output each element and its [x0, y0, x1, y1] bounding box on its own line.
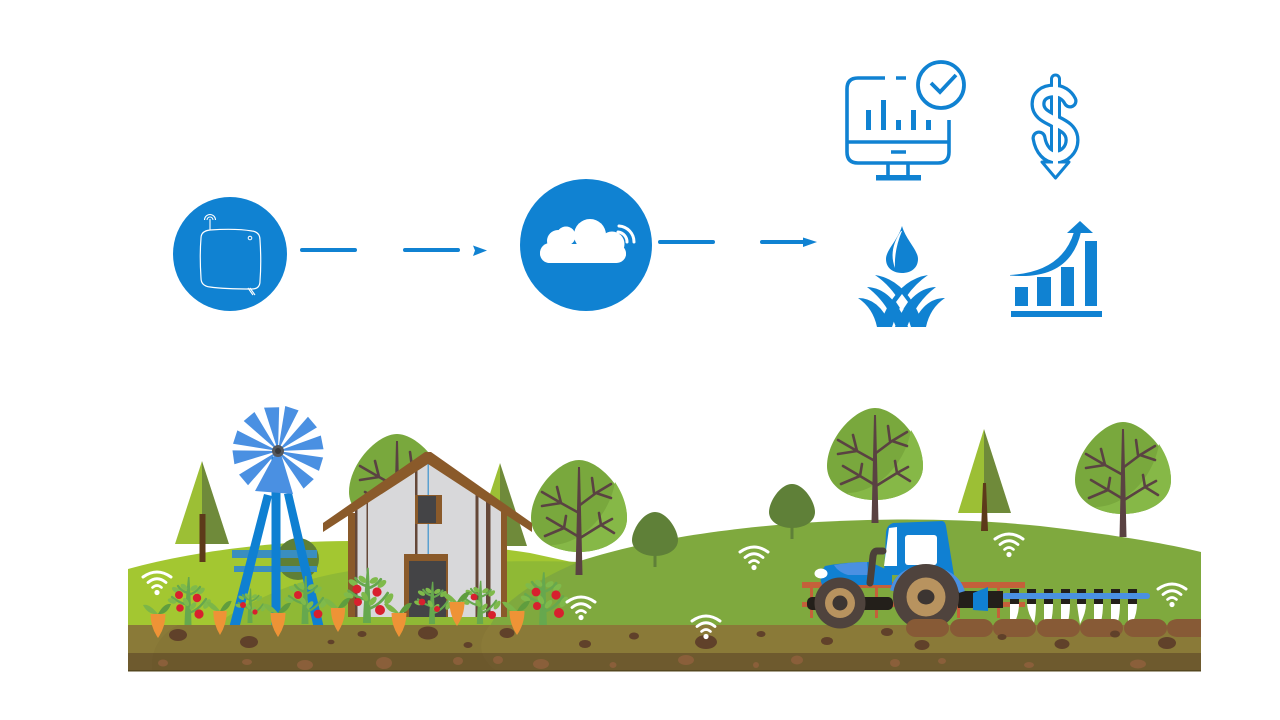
barn: [323, 452, 532, 617]
right hill: [490, 520, 1201, 626]
tree: right cone: [958, 429, 1011, 531]
tomatoes: [175, 585, 564, 619]
tree: small left: [632, 512, 678, 567]
fence bars: [232, 550, 317, 572]
tractor fender: [893, 569, 962, 592]
tractor hitch: [958, 591, 1003, 608]
icon: monitor with chart and check mark: [847, 62, 964, 180]
furrow mounds: [906, 619, 1201, 637]
tractor trailer frame: [802, 582, 1025, 618]
icon: growth bar chart with arrow: [1010, 221, 1102, 317]
small front wheel: [814, 578, 866, 628]
bush behind windmill: [277, 538, 319, 580]
cultivator tines: [1010, 604, 1137, 624]
tree: centre: [531, 460, 627, 575]
arrow: sensor to cloud: [302, 246, 487, 256]
tractor exhaust: [870, 551, 883, 583]
windmill: [229, 405, 324, 629]
icon: sensor device in blue circle: [173, 197, 287, 311]
tree: small right: [769, 484, 815, 539]
tree: behind house: [349, 434, 445, 549]
barn door: [404, 554, 448, 617]
barn roof: [323, 452, 532, 532]
soil stones: [169, 626, 1176, 650]
tree: right large: [827, 408, 923, 523]
left hill shaded band: [215, 561, 580, 626]
windmill tower: [229, 457, 324, 629]
tractor hood: [821, 562, 892, 585]
left hill: [128, 541, 590, 626]
arrow: cloud to benefits: [660, 238, 817, 247]
tractor cab: [884, 521, 954, 575]
axle: [807, 597, 893, 610]
tomato plants: [167, 568, 570, 625]
icon: dollar sign with down arrow: [1038, 79, 1072, 178]
large rear wheel: [893, 564, 959, 630]
icon: water drop over grass: [858, 226, 945, 327]
windmill blades: [232, 405, 324, 494]
tractor with cultivator: [802, 521, 1201, 640]
farm scene illustration: [128, 405, 1201, 672]
wifi signal icons: [143, 534, 1186, 639]
tree: left cone: [175, 461, 229, 562]
tree: far right: [1075, 422, 1171, 537]
barn window: [415, 495, 442, 524]
tree: cone behind house: [473, 463, 527, 546]
carrots: [143, 592, 530, 638]
icon: cloud with signal in blue circle: [520, 179, 652, 311]
subsoil spots: [158, 655, 1146, 670]
soil strip: [128, 625, 1201, 672]
